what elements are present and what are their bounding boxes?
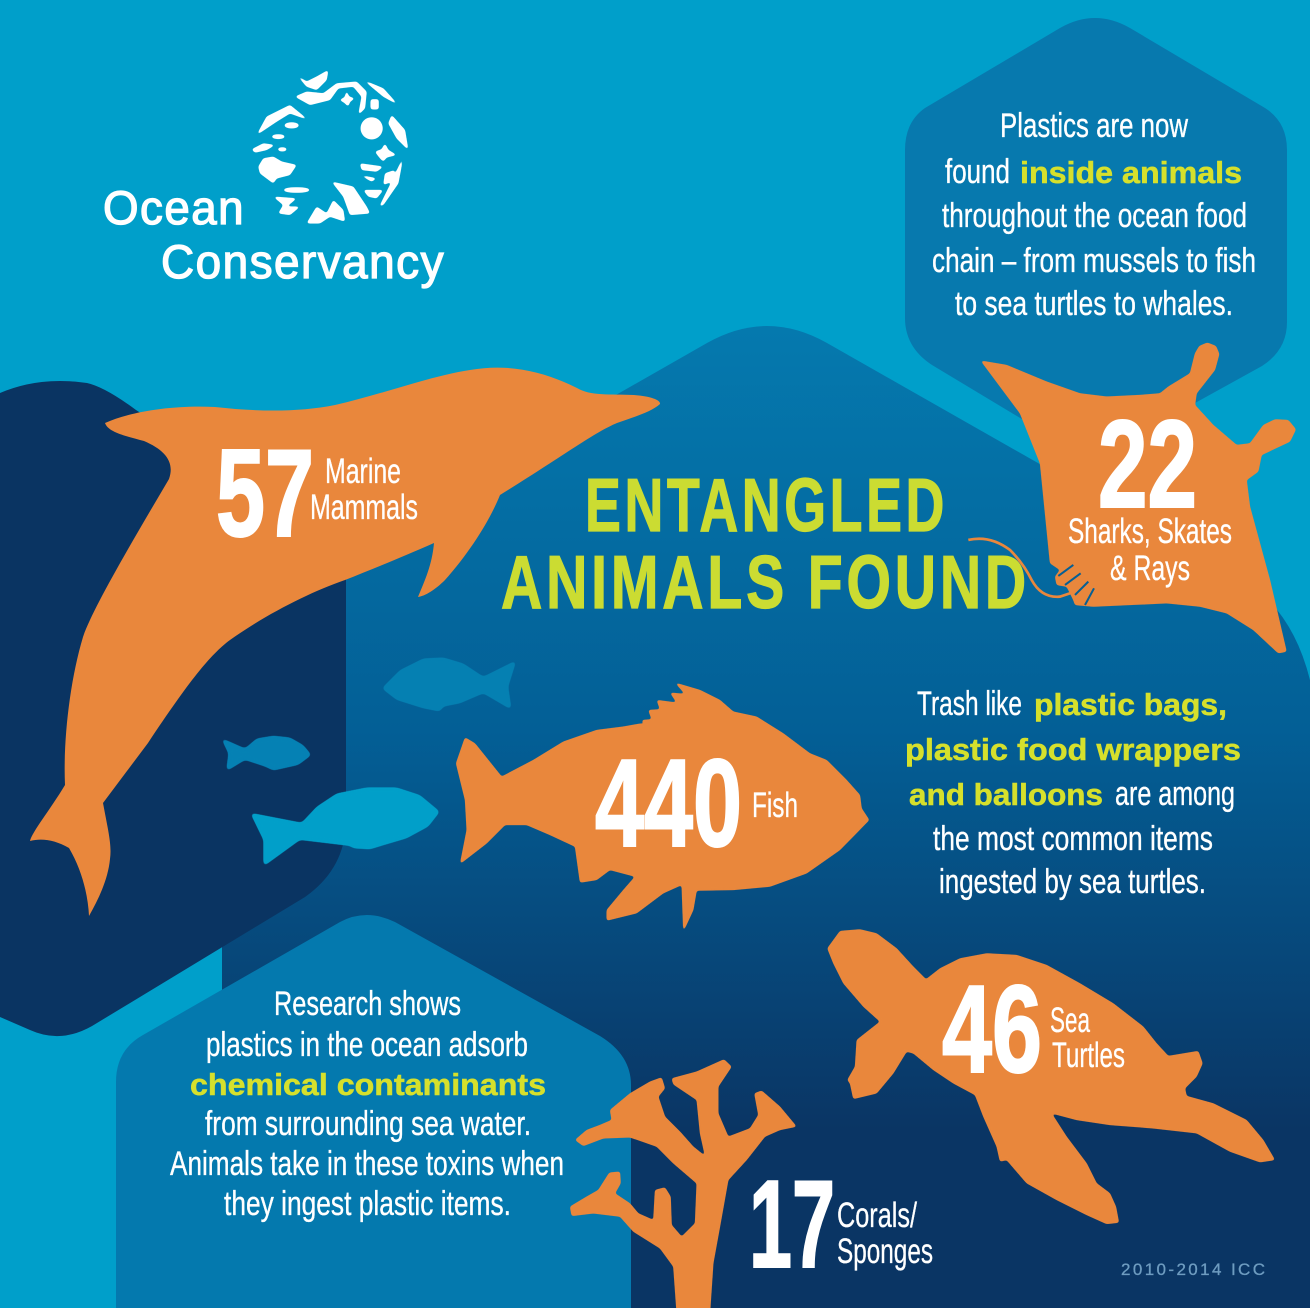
text: trash items: plastic food wrappers — [905, 732, 1241, 767]
text: trash items: ingested by sea turtles. — [939, 863, 1206, 901]
label: Sea Turtles: Turtles — [1052, 1036, 1125, 1075]
icon: ring of sea creatures — [252, 70, 408, 223]
count: 17: 17 — [749, 1156, 835, 1294]
text: chemical contaminants: from surrounding sea water. — [205, 1105, 531, 1143]
icon: small blue fish — [221, 736, 312, 772]
panel: chemical contaminants — [116, 915, 631, 1308]
text: plastics inside animals: found — [945, 153, 1010, 191]
text: plastics inside animals: inside animals — [1020, 155, 1242, 190]
panel: navy house shape behind dolphin — [0, 381, 346, 1036]
text: chemical contaminants: plastics in the ocean adsorb — [206, 1026, 528, 1064]
animal: coral with count — [570, 1059, 933, 1308]
text: chemical contaminants — [170, 985, 564, 1223]
label: Corals/Sponges: Sponges — [837, 1232, 933, 1271]
text: plastics inside animals: to sea turtles to whales. — [955, 285, 1233, 323]
tail — [968, 539, 1075, 597]
count: 46: 46 — [942, 961, 1042, 1099]
logo: Ocean Conservancy — [103, 70, 445, 288]
title: ENTANGLED — [585, 463, 948, 547]
label: Marine Mammals — [310, 452, 418, 527]
title: ANIMALS FOUND — [501, 540, 1030, 624]
label: Sea Turtles — [1050, 1001, 1125, 1075]
text: trash items: and balloons — [909, 777, 1103, 812]
label: Marine Mammals: Mammals — [310, 488, 418, 527]
label: Marine Mammals: Marine — [325, 452, 401, 491]
source credit: 2010-2014 ICC — [1121, 1260, 1265, 1279]
text: trash items: plastic bags, — [1034, 687, 1227, 722]
panel: plastics inside animals — [905, 18, 1287, 455]
label: Corals/Sponges — [837, 1196, 933, 1271]
text: trash items: are among — [1115, 775, 1235, 813]
panel: central gradient house shape — [222, 326, 1310, 1308]
label: Sea Turtles: Sea — [1050, 1001, 1090, 1040]
animal: manta ray with count — [968, 343, 1296, 653]
text: chemical contaminants: Research shows — [274, 985, 461, 1023]
logo: Ocean Conservancy: Ocean — [103, 181, 245, 234]
count: 22: 22 — [1098, 396, 1197, 534]
text: trash items — [905, 685, 1241, 901]
text: plastics inside animals: Plastics are now — [1000, 107, 1188, 145]
label: Sharks, Skates & Rays: & Rays — [1110, 549, 1190, 588]
text: chemical contaminants: Animals take in these toxins when — [170, 1145, 564, 1183]
count: 440: 440 — [595, 735, 742, 873]
label: Fish: Fish — [752, 786, 798, 825]
count: 57: 57 — [216, 425, 314, 563]
logo: Ocean Conservancy: Conservancy — [161, 235, 445, 288]
icon: faint background fish — [382, 657, 517, 712]
animal: fish with count — [456, 683, 869, 932]
text: trash items: Trash like — [917, 685, 1022, 723]
label: Sharks, Skates & Rays: Sharks, Skates — [1068, 512, 1232, 551]
icon: light blue fish — [250, 787, 440, 867]
animal: sea turtle with count — [827, 929, 1275, 1224]
text: chemical contaminants: chemical contaminants — [190, 1067, 546, 1102]
text: trash items: the most common items — [933, 820, 1213, 858]
label: Corals/Sponges: Corals/ — [837, 1196, 917, 1235]
title — [501, 463, 1030, 624]
text: chemical contaminants: they ingest plastic items. — [224, 1185, 511, 1223]
text: plastics inside animals — [932, 107, 1256, 323]
animal: dolphin with count — [30, 368, 660, 916]
label: Sharks, Skates & Rays — [1068, 512, 1232, 588]
